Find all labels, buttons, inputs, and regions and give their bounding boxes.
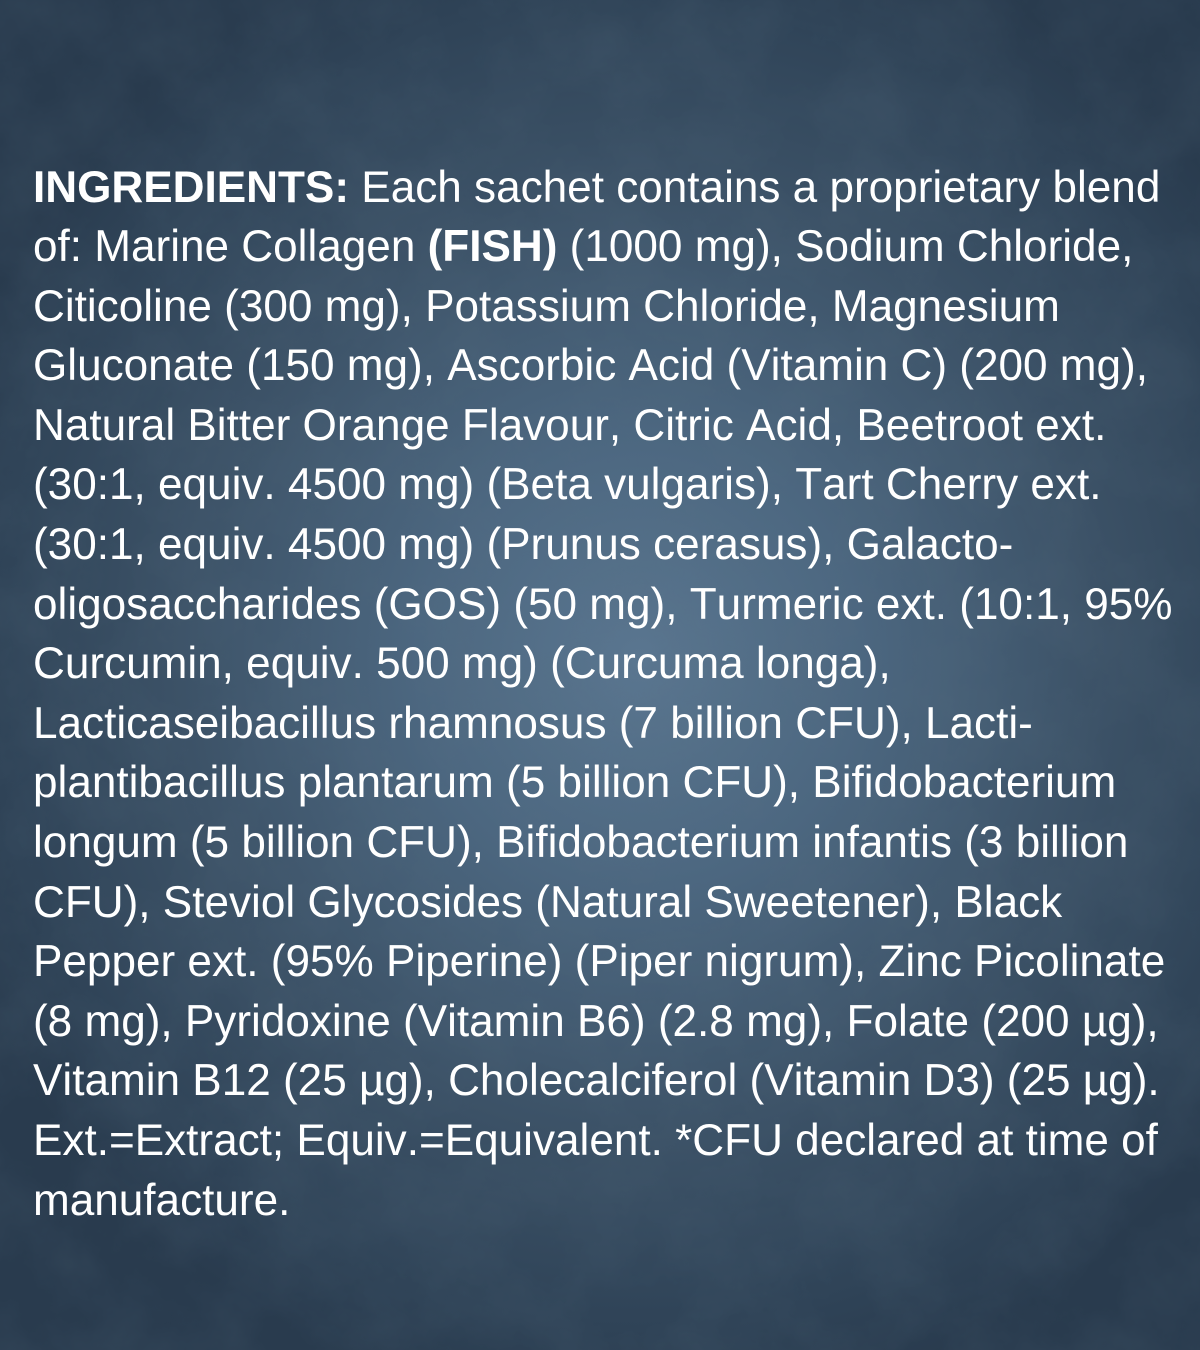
text block: ingredients list: longum (5 billion CFU), Bifidobacterium infantis (3 billion [33,818,1128,867]
text block: ingredients list: Pepper ext. (95% Piperine) (Piper nigrum), Zinc Picolinate [33,937,1165,986]
text block: ingredients list: oligosaccharides (GOS) (50 mg), Turmeric ext. (10:1, 95% [33,580,1172,629]
text block: ingredients list [33,162,1172,1225]
text block: ingredients list: plantibacillus plantarum (5 billion CFU), Bifidobacterium [33,758,1116,807]
text block: ingredients list: Natural Bitter Orange Flavour, Citric Acid, Beetroot ext. [33,401,1106,450]
text block: ingredients list: (8 mg), Pyridoxine (Vitamin B6) (2.8 mg), Folate (200 µg), [33,997,1159,1046]
text block: ingredients list: of: Marine Collagen (FISH) (1000 mg), Sodium Chloride, [33,222,1133,271]
text block: ingredients list: Curcumin, equiv. 500 mg) (Curcuma longa), [33,639,891,688]
text block: ingredients list: Vitamin B12 (25 µg), Cholecalciferol (Vitamin D3) (25 µg). [33,1056,1160,1105]
text block: ingredients list: INGREDIENTS: Each sachet contains a proprietary blend [33,162,1160,212]
text block: ingredients list: (30:1, equiv. 4500 mg) (Prunus cerasus), Galacto- [33,520,1013,569]
text block: ingredients list: Citicoline (300 mg), Potassium Chloride, Magnesium [33,282,1060,331]
text block: ingredients list: CFU), Steviol Glycosides (Natural Sweetener), Black [33,878,1062,927]
text block: ingredients list: Ext.=Extract; Equiv.=Equivalent. *CFU declared at time of [33,1116,1158,1165]
text block: ingredients list: (30:1, equiv. 4500 mg) (Beta vulgaris), Tart Cherry ext. [33,460,1101,509]
text block: ingredients list: Gluconate (150 mg), Ascorbic Acid (Vitamin C) (200 mg), [33,341,1148,390]
text block: ingredients list: manufacture. [33,1176,290,1225]
text block: ingredients list: Lacticaseibacillus rhamnosus (7 billion CFU), Lacti- [33,699,1033,748]
